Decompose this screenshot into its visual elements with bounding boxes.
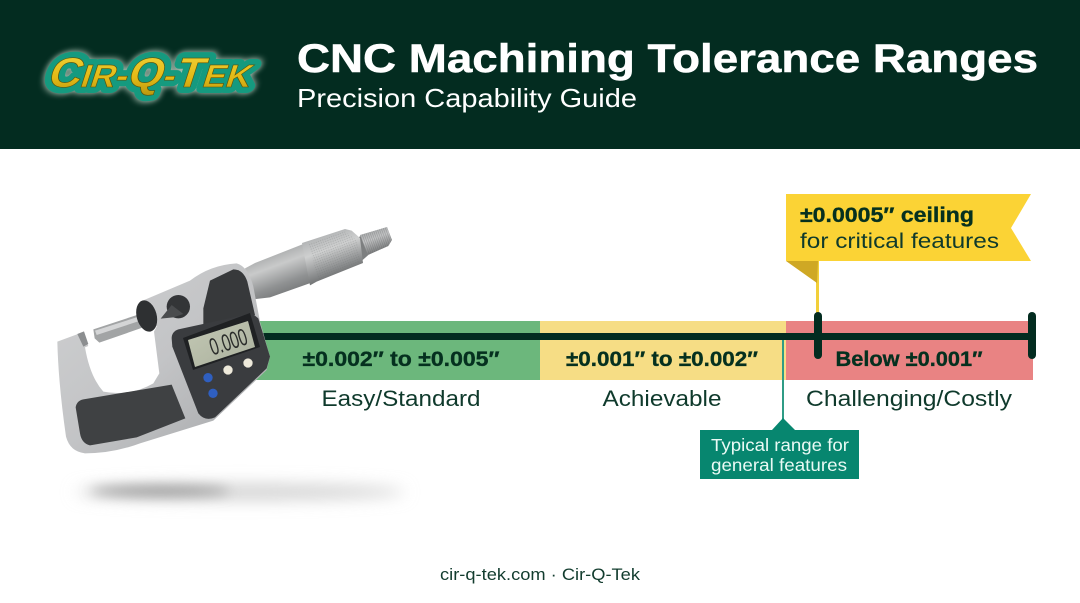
band: challenging/costly — [786, 321, 1033, 411]
spindle collar — [133, 298, 160, 334]
lcd: 0.000 — [206, 324, 251, 361]
micrometer shadow — [75, 484, 405, 500]
callout: ceiling flag: ±0.0005″ ceiling — [800, 204, 974, 227]
lock knob — [161, 295, 190, 319]
band: achievable: Achievable — [602, 386, 722, 411]
icon: digital micrometer — [57, 227, 392, 453]
callout: ceiling flag: for critical features — [800, 230, 999, 253]
ratchet — [360, 227, 392, 255]
logo: Cir-Q-Tek: CIR-Q-TEK — [43, 49, 261, 96]
spindle — [93, 314, 145, 343]
band: easy/standard — [250, 321, 540, 411]
grip — [76, 385, 185, 445]
frame — [57, 263, 270, 453]
scale axis line — [262, 333, 1031, 340]
band: easy/standard: Easy/Standard — [322, 386, 480, 411]
callout: typical range: general features — [711, 455, 847, 475]
title: CNC Machining Tolerance Ranges — [297, 37, 1038, 81]
logo: Cir-Q-Tek: CIR-Q-TEK — [43, 49, 261, 96]
callout: ceiling flag — [786, 194, 1031, 283]
upper housing — [203, 269, 255, 327]
buttons — [203, 358, 253, 398]
subtitle: Precision Capability Guide — [297, 83, 637, 113]
lcd — [183, 313, 260, 370]
control panel — [172, 313, 270, 419]
callout: typical range: Typical range for — [711, 435, 849, 455]
logo: Cir-Q-Tek: CIR-Q-TEK — [43, 49, 261, 96]
tick: ceiling — [814, 312, 822, 359]
sleeve — [245, 244, 313, 299]
anvil — [77, 331, 88, 347]
thimble — [302, 229, 363, 285]
band: achievable: ±0.001″ to ±0.002″ — [566, 348, 758, 371]
band: easy/standard: ±0.002″ to ±0.005″ — [302, 348, 500, 371]
header band — [0, 0, 1080, 149]
callout: typical range — [700, 418, 859, 479]
band: challenging/costly: Challenging/Costly — [806, 386, 1012, 411]
band: achievable — [540, 321, 786, 411]
footer: cir-q-tek.com · Cir-Q-Tek — [440, 566, 641, 584]
band: challenging/costly: Below ±0.001″ — [836, 348, 982, 371]
gold leader line — [816, 261, 819, 314]
ratchet neck — [355, 236, 368, 260]
tolerance scale — [250, 261, 1036, 422]
tick: end — [1028, 312, 1036, 359]
teal leader line — [782, 340, 784, 422]
